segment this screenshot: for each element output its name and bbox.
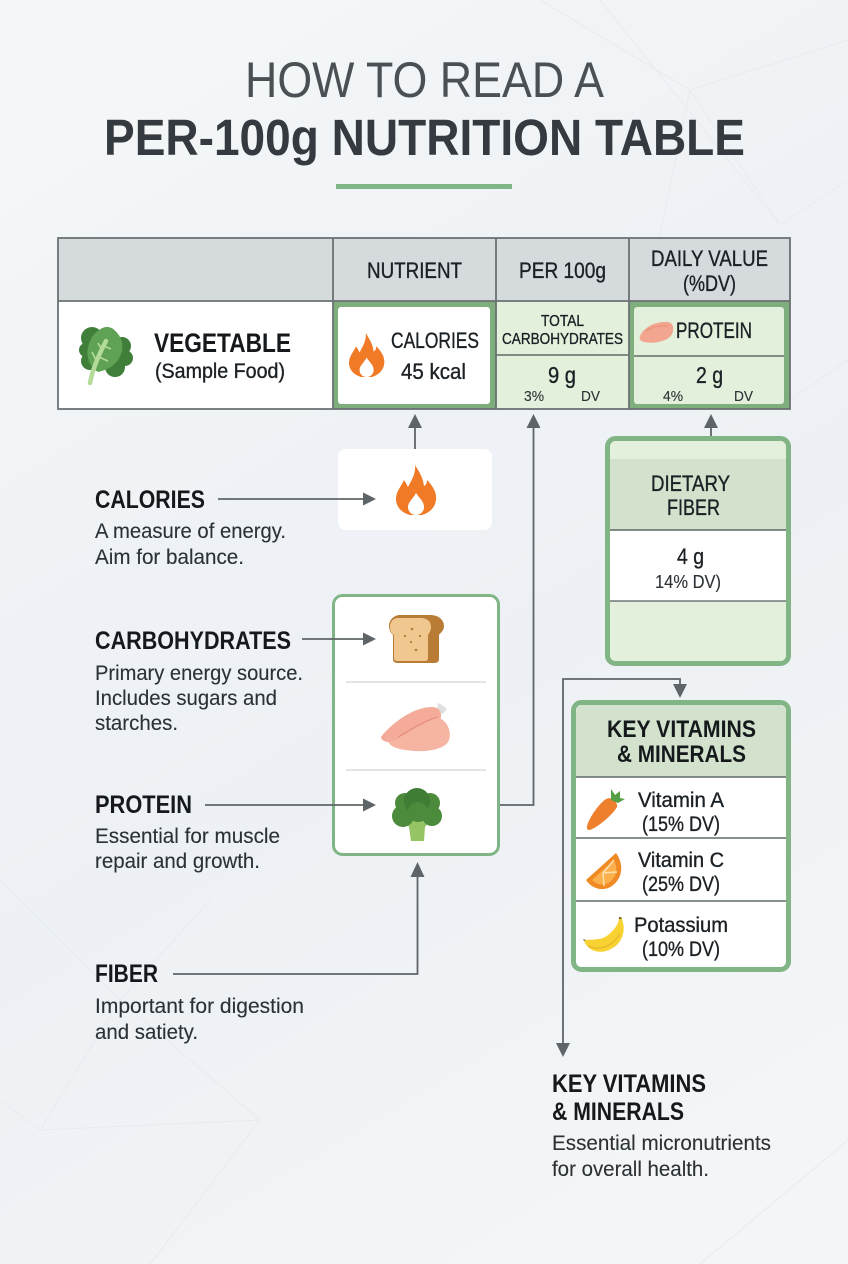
- arrow: protein label to icon: [205, 798, 376, 812]
- protein cell: [629, 301, 790, 409]
- panel: dietary fiber: FIBER: [667, 495, 720, 520]
- carbohydrates cell: CARBOHYDRATES: [502, 331, 623, 348]
- title: PER-100g NUTRITION TABLE: [104, 109, 745, 166]
- text block: protein: repair and growth.: [95, 850, 260, 873]
- table header labels: (%DV): [683, 271, 736, 296]
- protein cell: 2 g: [696, 362, 723, 388]
- text block: fiber: Important for digestion: [95, 995, 304, 1018]
- panel: key vitamins and minerals: (25% DV): [642, 873, 720, 896]
- icon: banana: [583, 917, 624, 952]
- carbohydrates cell: DV: [581, 388, 600, 405]
- panel: key vitamins and minerals: (15% DV): [642, 813, 720, 836]
- table header labels: [367, 246, 768, 296]
- text block: protein: Essential for muscle: [95, 825, 280, 848]
- text block: carbohydrates: [95, 627, 303, 735]
- text block: key vitamins and minerals: KEY VITAMINS: [552, 1070, 706, 1098]
- text block: calories: Aim for balance.: [95, 546, 244, 569]
- text block: carbohydrates: Primary energy source.: [95, 662, 303, 685]
- arrow: food panel to per 100g column: [500, 414, 540, 805]
- text block: fiber: and satiety.: [95, 1021, 198, 1044]
- table header labels: PER 100g: [519, 258, 606, 283]
- panel: dietary fiber: 14% DV): [655, 572, 721, 592]
- panel: key vitamins and minerals: Vitamin A: [638, 789, 724, 812]
- arrow: calories label to icon: [218, 492, 376, 506]
- icon: flame: [349, 333, 384, 377]
- icon: chicken breast: [381, 703, 450, 751]
- vegetable label: [154, 328, 291, 383]
- carbohydrates cell: TOTAL: [541, 313, 584, 330]
- calories cell: CALORIES: [391, 328, 479, 353]
- title: HOW TO READ A: [245, 52, 605, 108]
- panel: key vitamins and minerals: & MINERALS: [617, 741, 746, 768]
- icon: orange slice: [586, 853, 621, 889]
- nutrition table: [58, 238, 790, 409]
- arrow: fiber label to food panel: [173, 862, 424, 974]
- carbohydrates cell: 9 g: [548, 362, 576, 388]
- text block: fiber: FIBER: [95, 960, 158, 988]
- title: [104, 52, 745, 189]
- arrow: fiber panel to daily value column: [704, 414, 718, 436]
- arrow: vitamins connector: [556, 679, 687, 1057]
- icon: carrot: [587, 789, 625, 830]
- panel: key vitamins and minerals: Potassium: [634, 914, 728, 937]
- text block: calories: A measure of energy.: [95, 520, 286, 543]
- protein cell: DV: [734, 388, 753, 405]
- text block: calories: [95, 486, 286, 569]
- text block: carbohydrates: CARBOHYDRATES: [95, 627, 291, 655]
- text block: key vitamins and minerals: [552, 1070, 771, 1181]
- panel: key vitamins and minerals: KEY VITAMINS: [607, 716, 756, 743]
- carbohydrates cell: [496, 301, 629, 409]
- text block: carbohydrates: starches.: [95, 712, 178, 735]
- table header labels: DAILY VALUE: [651, 246, 768, 271]
- text block: carbohydrates: Includes sugars and: [95, 687, 277, 710]
- icon: chicken small: [640, 322, 673, 343]
- vegetable label: VEGETABLE: [154, 328, 291, 358]
- icon: flame large: [396, 465, 436, 515]
- text block: key vitamins and minerals: Essential micronutrients: [552, 1132, 771, 1155]
- text block: key vitamins and minerals: & MINERALS: [552, 1098, 684, 1126]
- arrow: carbohydrates label to icon: [302, 632, 376, 646]
- panel: food icons: [334, 596, 498, 854]
- panel: dietary fiber: 4 g: [677, 544, 704, 569]
- panel: key vitamins and minerals: [574, 702, 788, 970]
- icon: bread: [389, 615, 444, 663]
- table header labels: NUTRIENT: [367, 258, 462, 283]
- protein cell: 4%: [663, 388, 683, 405]
- text block: fiber: [95, 960, 304, 1044]
- icon: broccoli: [392, 788, 442, 841]
- text block: protein: PROTEIN: [95, 791, 192, 819]
- protein cell: PROTEIN: [676, 318, 752, 343]
- text block: protein: [95, 791, 280, 873]
- vegetable label: (Sample Food): [155, 360, 285, 383]
- panel: calories icon card: [338, 449, 492, 530]
- arrow: calories icon to table: [408, 414, 422, 449]
- calories cell: 45 kcal: [401, 359, 466, 384]
- carbohydrates cell: 3%: [524, 388, 544, 405]
- panel: dietary fiber: DIETARY: [651, 471, 730, 496]
- panel: key vitamins and minerals: Vitamin C: [638, 849, 724, 872]
- text block: calories: CALORIES: [95, 486, 205, 514]
- panel: dietary fiber: [608, 438, 788, 664]
- calories cell: [333, 301, 496, 409]
- panel: key vitamins and minerals: (10% DV): [642, 938, 720, 961]
- text block: key vitamins and minerals: for overall health.: [552, 1158, 709, 1181]
- icon: lettuce: [79, 327, 133, 383]
